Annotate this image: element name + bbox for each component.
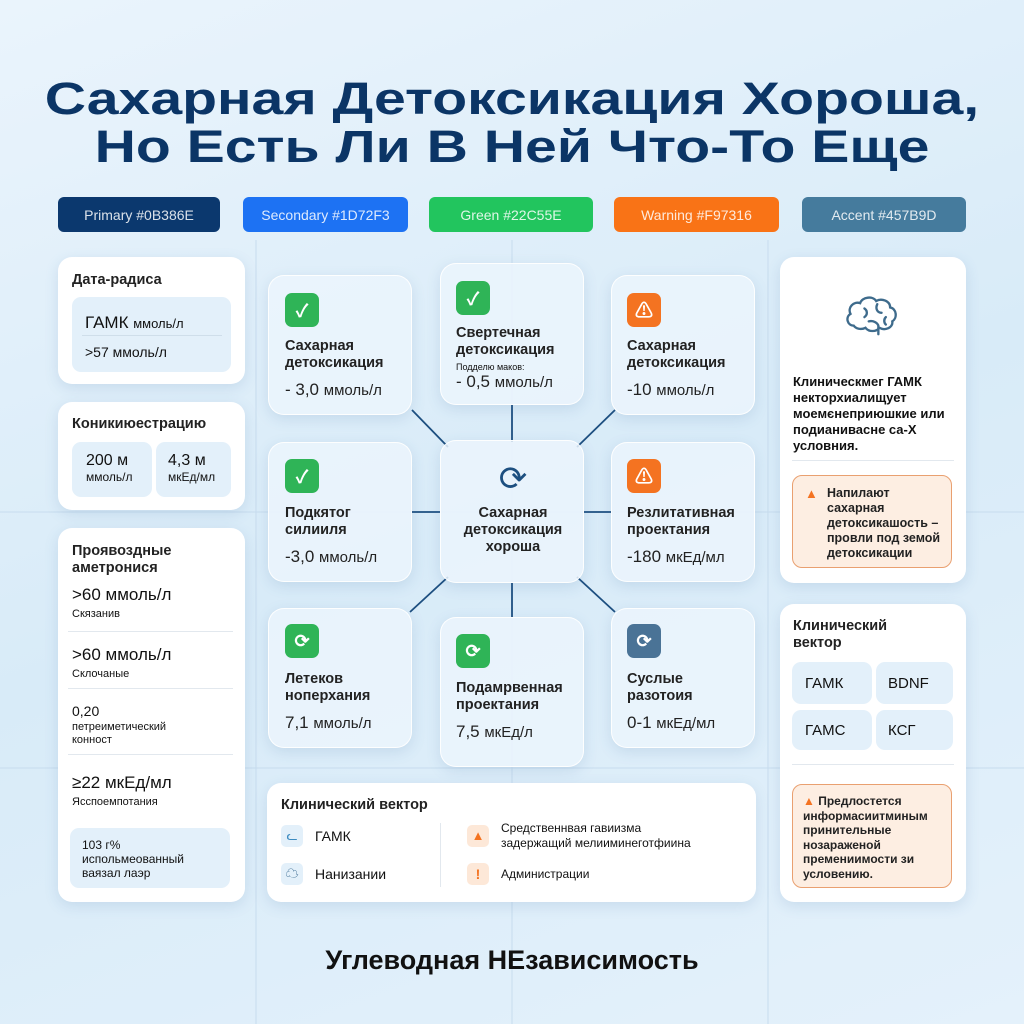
card: r1c1	[268, 275, 412, 415]
card: r1c1: детоксикация	[285, 355, 384, 371]
card: r3c3: ⟳	[636, 630, 652, 650]
panel: bottom clinical vector: ▲	[472, 828, 484, 843]
panel: left data radius	[58, 257, 245, 384]
card: r2c1: -3,0 ммоль/л	[285, 547, 377, 566]
card: r1c1: Сахарная	[285, 338, 354, 354]
panel: derivative metrics: Скязанив	[72, 608, 120, 620]
panel: derivative metrics: Проявоздные	[72, 543, 171, 559]
panel: derivative metrics	[58, 528, 245, 902]
title: Сахарная Детоксикация Хороша,	[45, 73, 979, 124]
panel: right clinical vector: КСГ	[888, 722, 916, 739]
card: r1c2: ✓	[466, 289, 480, 309]
panel: derivative metrics: петреиметический	[72, 721, 166, 733]
panel: right clinical vector: информасиитминым	[803, 808, 928, 822]
panel: bottom clinical vector: Нанизании	[315, 866, 386, 882]
card: r2c3: -180 мкЕд/мл	[627, 547, 725, 566]
panel: right brain: подианивасне са-Х	[793, 422, 917, 437]
card: center: ⟳	[499, 460, 527, 498]
card: r3c1: Летеков	[285, 671, 343, 687]
panel: right brain: провли под земой	[827, 531, 940, 545]
panel: right brain	[780, 257, 966, 583]
card: r1c3	[611, 275, 755, 415]
card: r2c1: ✓	[295, 467, 308, 487]
card: r3c3	[611, 608, 755, 748]
card: r1c3: -10 ммоль/л	[627, 380, 714, 399]
panel: bottom clinical vector: ГАМК	[315, 828, 351, 844]
color chips: Secondary #1D72F3	[261, 206, 390, 222]
panel: derivative metrics: ≥22 мкЕд/мл	[72, 773, 172, 792]
panel: derivative metrics: испольмеованный	[82, 852, 184, 866]
panel: concentration: Коникиюестрацию	[72, 416, 206, 432]
panel: right clinical vector: вектор	[793, 635, 842, 651]
card: r3c2: ⟳	[465, 640, 481, 660]
card: r3c3: Суслые	[627, 671, 683, 687]
card: center	[440, 440, 584, 583]
card: r3c2	[440, 617, 584, 767]
card: r2c1	[268, 442, 412, 582]
icon: brain	[846, 296, 897, 336]
panel: bottom clinical vector	[267, 783, 756, 902]
card: r1c3: детоксикация	[627, 355, 726, 371]
card: r2c3	[611, 442, 755, 582]
card: center: хороша	[486, 539, 540, 555]
card: r1c2	[440, 263, 584, 405]
panel: right clinical vector: премениимости зи	[803, 852, 914, 866]
panel: left data radius: >57 ммоль/л	[85, 344, 167, 360]
card: r1c1: ✓	[295, 301, 308, 321]
footer text: Углеводная НЕзависимость	[325, 945, 699, 975]
panel: right clinical vector: ГАМС	[805, 722, 845, 739]
color chips	[58, 197, 966, 232]
panel: right clinical vector: условению.	[803, 866, 873, 880]
panel: right brain: Напилают	[827, 486, 890, 500]
card: r2c1: Подкятог	[285, 505, 351, 521]
card: r2c1: силииля	[285, 522, 347, 538]
panel: bottom clinical vector: Администрации	[501, 867, 589, 881]
panel: derivative metrics: >60 ммоль/л	[72, 585, 171, 604]
panel: derivative metrics: ваязал лаэр	[82, 866, 150, 880]
panel: bottom clinical vector: Клинический вектор	[281, 797, 428, 813]
panel: right brain: некторхиалищует	[793, 390, 907, 405]
card: r3c1: 7,1 ммоль/л	[285, 713, 371, 732]
panel: derivative metrics: Ясспоемпотания	[72, 796, 158, 808]
card: r1c3: Сахарная	[627, 338, 696, 354]
card: r1c2: - 0,5 ммоль/л	[456, 372, 553, 391]
card: r1c2: Свертечная	[456, 325, 540, 341]
panel: concentration: 4,3 м	[168, 452, 206, 469]
panel: derivative metrics: 0,20	[72, 703, 99, 719]
card: r3c1: ⟳	[294, 630, 310, 650]
card: r3c2: 7,5 мкЕд/л	[456, 722, 533, 741]
panel: concentration: 200 м	[86, 452, 128, 469]
card: r1c2: детоксикация	[456, 342, 554, 358]
panel: derivative metrics: конност	[72, 734, 112, 746]
card: r1c2: Подделю маков:	[456, 362, 525, 372]
panel: right clinical vector: нозараженой	[803, 838, 881, 852]
panel: concentration	[58, 402, 245, 510]
title	[45, 73, 979, 172]
panel: right brain: детоксикашость –	[827, 516, 938, 530]
panel: right clinical vector	[780, 604, 966, 902]
card: r1c3: ⚠	[635, 301, 653, 321]
panel: right clinical vector: ГАМК	[805, 675, 843, 692]
panel: left data radius: ГАМК ммоль/л	[85, 313, 184, 332]
panel: right clinical vector: BDNF	[888, 675, 929, 692]
card: r2c3: ⚠	[635, 467, 653, 487]
panel: right brain: сахарная	[827, 501, 884, 515]
panel: derivative metrics: 103 г%	[82, 838, 120, 852]
panel: right clinical vector: ▲ Предлостется	[803, 794, 902, 808]
card: r3c3: разотоия	[627, 688, 693, 704]
card: r3c1	[268, 608, 412, 748]
card: r3c2: проектания	[456, 697, 539, 713]
panel: derivative metrics: Склочаные	[72, 668, 129, 680]
card: r1c1: - 3,0 ммоль/л	[285, 380, 382, 399]
panel: bottom clinical vector: ☁	[285, 866, 298, 881]
panel: right brain: условния.	[793, 438, 858, 453]
panel: derivative metrics: аметронися	[72, 560, 158, 576]
panel: bottom clinical vector: !	[476, 866, 480, 882]
color chips: Warning #F97316	[641, 206, 752, 222]
color chips: Primary #0B386E	[84, 206, 194, 222]
color chips: Green #22C55E	[460, 206, 562, 222]
title: Но Есть Ли В Ней Что-То Еще	[95, 121, 929, 172]
card: center: детоксикация	[464, 522, 562, 538]
color chips: Accent #457B9D	[831, 206, 937, 222]
panel: left data radius: Дата-радиса	[72, 272, 162, 288]
panel: bottom clinical vector: задержащий мелииминеготфиина	[501, 836, 691, 850]
card: r3c2: Подамрвенная	[456, 680, 563, 696]
panel: right brain: моемєнеприюшкие или	[793, 406, 945, 421]
panel: right brain: ▲	[805, 486, 818, 501]
panel: bottom clinical vector: ᓚ	[286, 828, 298, 843]
panel: right clinical vector: Клинический	[793, 618, 887, 634]
panel: concentration: ммоль/л	[86, 470, 132, 484]
card: r3c3: 0-1 мкЕд/мл	[627, 713, 715, 732]
panel: derivative metrics: >60 ммоль/л	[72, 645, 171, 664]
card: center: Сахарная	[478, 505, 547, 521]
panel: concentration: мкЕд/мл	[168, 470, 215, 484]
card: r2c3: Резлитативная	[627, 505, 735, 521]
panel: right brain: детоксикации	[827, 546, 912, 560]
card: r3c1: ноперхания	[285, 688, 370, 704]
panel: bottom clinical vector: Средственнвая гавиизма	[501, 821, 641, 835]
panel: right clinical vector: принительные	[803, 823, 891, 837]
card: r2c3: проектания	[627, 522, 710, 538]
panel: right brain: Клиническмег ГАМК	[793, 374, 922, 389]
